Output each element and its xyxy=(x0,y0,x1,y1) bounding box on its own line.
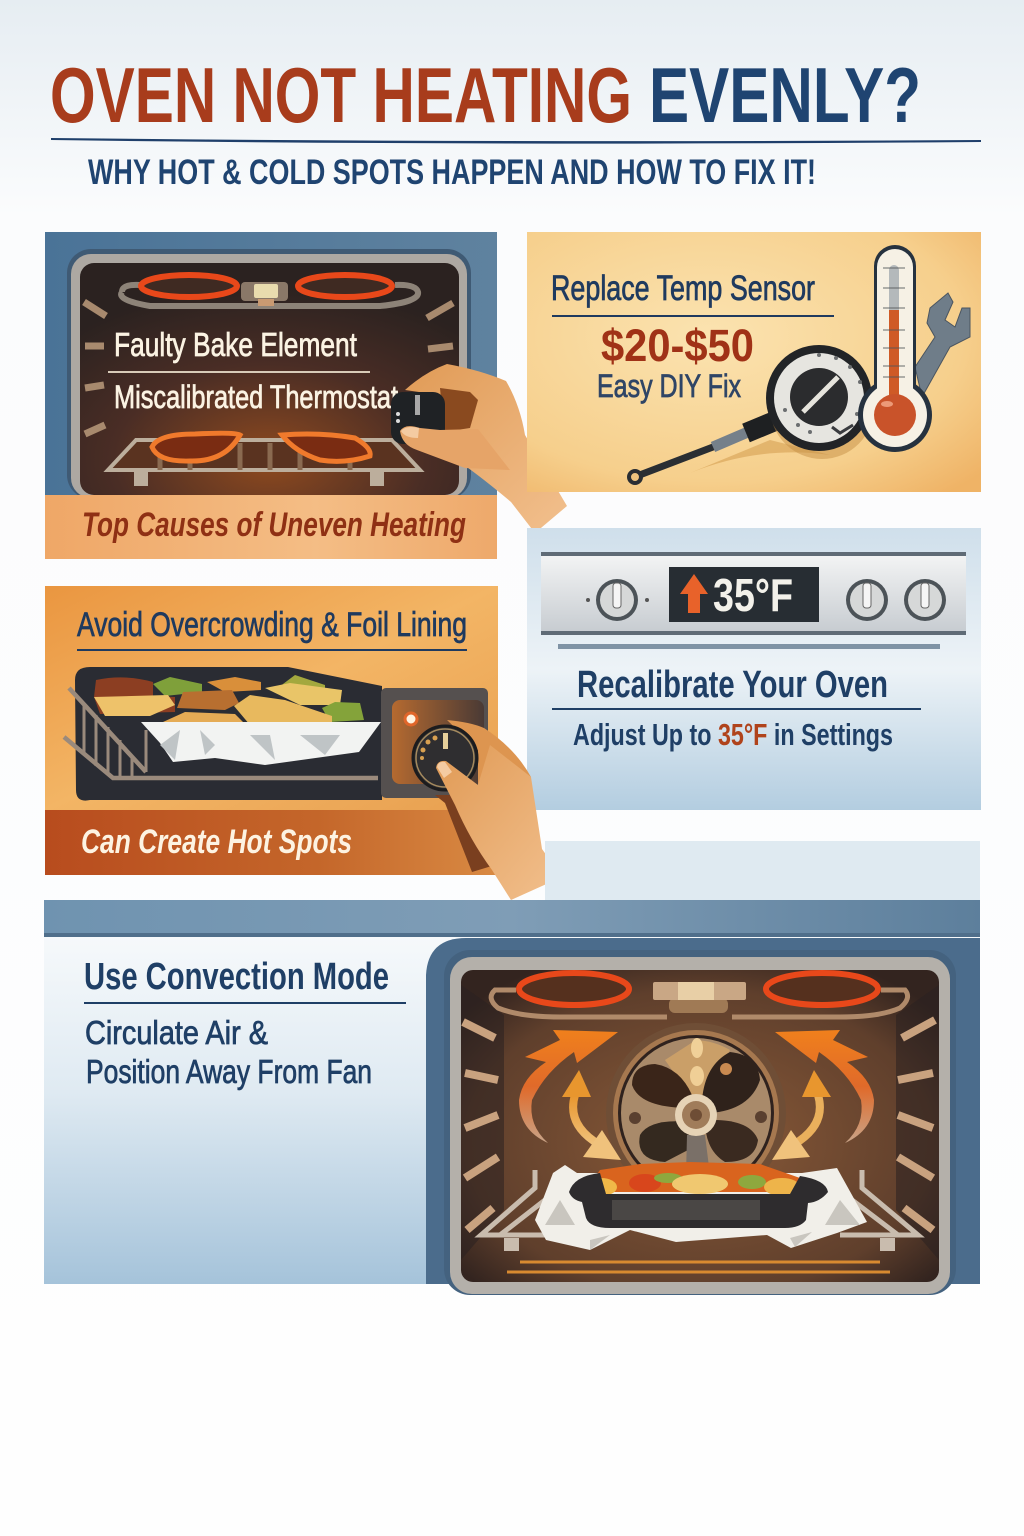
icon: thermometer xyxy=(858,245,932,452)
band: top causes: Top Causes of Uneven Heating xyxy=(82,506,466,544)
knob xyxy=(904,579,946,621)
note: Easy DIY Fix xyxy=(597,368,741,404)
subtitle: WHY HOT & COLD SPOTS HAPPEN AND HOW TO FIX IT! xyxy=(88,153,816,192)
band: hot spots xyxy=(45,810,498,875)
band behind convection panel xyxy=(545,841,980,901)
title: EVENLY? xyxy=(649,51,921,139)
rack xyxy=(481,1170,918,1235)
icon: wrench xyxy=(915,293,970,397)
panel: replace temp sensor xyxy=(527,232,981,492)
knob xyxy=(846,579,888,621)
note: Adjust Up to 35°F in Settings xyxy=(573,717,893,752)
panel: convection mode xyxy=(44,900,980,1295)
heading: Avoid Overcrowding & Foil Lining xyxy=(77,606,467,644)
heading: Use Convection Mode xyxy=(84,956,389,998)
band: hot spots: Can Create Hot Spots xyxy=(81,823,352,861)
body text: Circulate Air & xyxy=(85,1014,268,1051)
foil xyxy=(535,1165,867,1250)
label: faulty bake element: Faulty Bake Element xyxy=(114,326,357,363)
cavity side walls xyxy=(461,985,939,1260)
fan xyxy=(606,1023,786,1203)
oven tray illustration xyxy=(64,667,382,801)
icon: oven control with hand xyxy=(381,688,562,900)
rack slots xyxy=(463,1020,935,1230)
heading: Replace Temp Sensor xyxy=(551,269,815,308)
panel: overcrowding xyxy=(45,586,498,875)
airflow arrows xyxy=(519,1030,874,1160)
knob xyxy=(596,579,638,621)
oven cavity xyxy=(67,249,471,499)
baking dish with food xyxy=(569,1162,828,1228)
oven control strip xyxy=(541,552,966,649)
display: 35°F xyxy=(713,569,793,621)
price: $20-$50 xyxy=(601,320,754,371)
icon: probe and dial xyxy=(629,345,874,483)
panel: top causes xyxy=(45,232,497,559)
body text: Position Away From Fan xyxy=(86,1053,372,1090)
foil xyxy=(141,722,381,765)
band: top causes xyxy=(45,495,497,559)
body text xyxy=(85,1014,372,1090)
title: OVEN NOT HEATING xyxy=(50,51,632,139)
heading: Recalibrate Your Oven xyxy=(577,664,888,706)
panel: recalibrate oven xyxy=(527,528,981,810)
display xyxy=(669,567,819,622)
icon: hand on thermostat knob xyxy=(391,364,567,533)
oven illustration xyxy=(426,938,980,1295)
label: miscalibrated thermostat: Miscalibrated Thermostat xyxy=(114,379,398,415)
heating elements xyxy=(491,973,908,1017)
